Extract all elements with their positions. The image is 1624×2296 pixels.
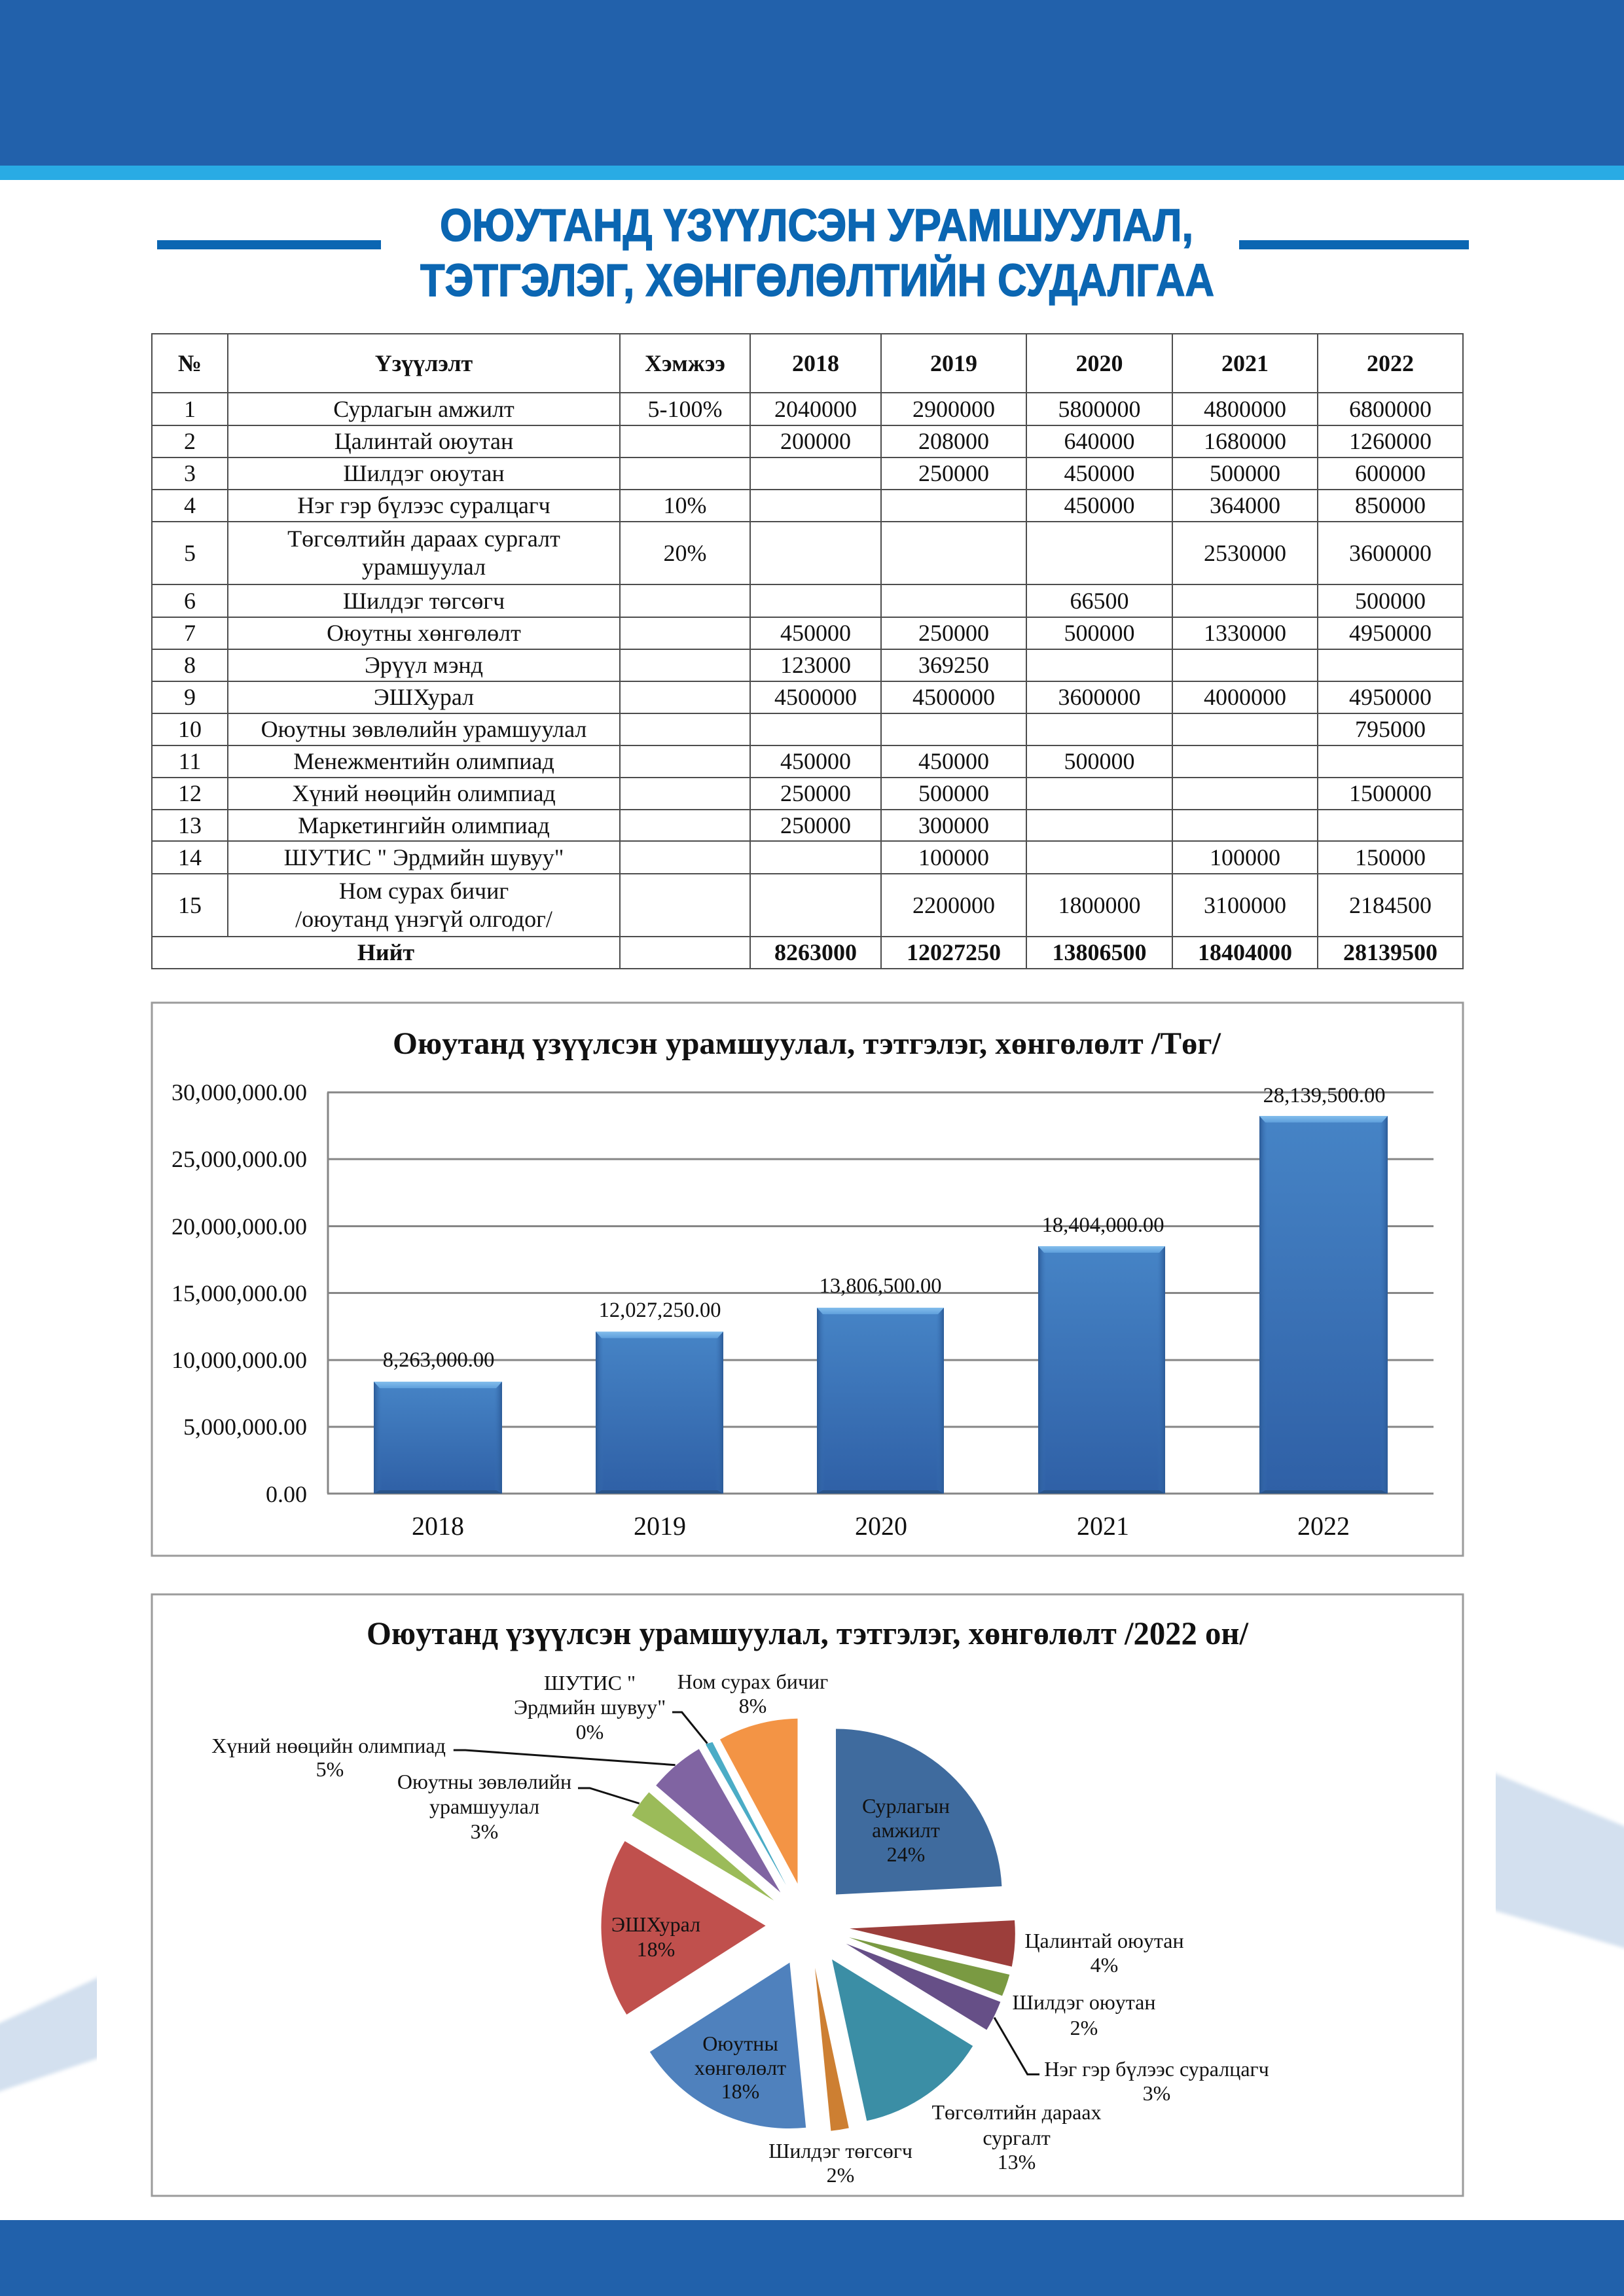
table header row: 1500000 — [1349, 780, 1432, 806]
table header row: 20% — [664, 539, 707, 565]
light blue band — [0, 166, 1624, 180]
slice: ШУТИС Эрдмийн шувуу — [706, 1742, 786, 1885]
label: Сурлагын амжилт: 24% — [887, 1842, 925, 1866]
table header row: 600000 — [1355, 460, 1426, 486]
table header row: ЭШХурал — [374, 684, 474, 710]
title line 2: ТЭТГЭЛЭГ, ХӨНГӨЛӨЛТИЙН СУДАЛГАА — [420, 254, 1214, 306]
table header row: Төгсөлтийн дараах сургалт — [287, 526, 560, 552]
table header row: Менежментийн олимпиад — [293, 748, 554, 774]
label: Төгсөлтийн дараах сургалт: сургалт — [983, 2126, 1051, 2149]
table header row: /оюутанд үнэгүй олгодог/ — [295, 906, 552, 932]
label: Сурлагын амжилт: Сурлагын — [862, 1794, 950, 1818]
table header row: 250000 — [918, 620, 989, 646]
table header row: 14 — [178, 844, 202, 870]
table header row: 11 — [179, 748, 201, 774]
table header row: 123000 — [780, 652, 851, 678]
table header row: 12 — [178, 780, 202, 806]
label: Оюутны хөнгөлөлт: 18% — [721, 2079, 759, 2103]
table header row: Хэмжээ — [645, 350, 725, 376]
table header row: Маркетингийн олимпиад — [298, 812, 550, 838]
bar 2020 — [817, 1308, 944, 1494]
table header row: 450000 — [918, 748, 989, 774]
top header band — [0, 0, 1624, 180]
bar value labels: 8,263,000.00 — [383, 1348, 494, 1372]
label: Шилдэг оюутан: Шилдэг оюутан — [1013, 1990, 1155, 2014]
slice: Нэг гэр бүлээс суралцагч — [846, 1944, 1000, 2030]
bar value labels: 12,027,250.00 — [599, 1299, 721, 1322]
bar value labels: 13,806,500.00 — [820, 1274, 941, 1298]
table header row: Сурлагын амжилт — [333, 395, 514, 422]
table header row: 7 — [184, 620, 196, 646]
slice: Шилдэг оюутан — [849, 1937, 1009, 1996]
table header row: 2022 — [1367, 350, 1414, 376]
table header row: 640000 — [1064, 428, 1135, 454]
title block — [157, 200, 1469, 306]
slice: Ном сурах бичиг — [720, 1719, 797, 1884]
y axis labels: 15,000,000.00 — [171, 1280, 307, 1306]
x axis year labels — [412, 1511, 1350, 1541]
table header row: 4800000 — [1204, 395, 1286, 422]
table header row: 450000 — [1064, 492, 1135, 518]
table header row: 3600000 — [1058, 684, 1140, 710]
label: ШУТИС: Эрдмийн шувуу" — [514, 1695, 666, 1719]
label: Сурлагын амжилт: амжилт — [872, 1818, 940, 1842]
table header row: 3600000 — [1349, 539, 1432, 565]
label: ЭШХурал: ЭШХурал — [611, 1912, 700, 1936]
label: Цалинтай оюутан: Цалинтай оюутан — [1024, 1929, 1184, 1952]
table header row: 4 — [184, 492, 196, 518]
label: ЭШХурал: 18% — [637, 1937, 675, 1961]
table header row: 15 — [178, 891, 202, 918]
table header row: Хүний нөөцийн олимпиад — [292, 780, 556, 806]
table header row: 3100000 — [1204, 891, 1286, 918]
label: Хүний нөөцийн олимпиад: 5% — [316, 1757, 344, 1781]
bar value labels — [383, 1084, 1385, 1372]
table header row: 450000 — [780, 620, 851, 646]
table header row: 500000 — [918, 780, 989, 806]
label: Оюутны зөвлөлийн урамшуулал: Оюутны зөвлөлийн — [397, 1770, 571, 1793]
table header row: 4000000 — [1204, 684, 1286, 710]
table header row: 66500 — [1070, 588, 1128, 614]
leader lines — [454, 1712, 1039, 2074]
table total row: 18404000 — [1198, 939, 1292, 965]
table header row: 6800000 — [1349, 395, 1432, 422]
table total row: 12027250 — [907, 939, 1001, 965]
bar 2019 — [596, 1331, 723, 1494]
slice: Шилдэг төгсөгч — [815, 1967, 849, 2131]
table header row: Шилдэг оюутан — [343, 460, 505, 486]
label: Хүний нөөцийн олимпиад: Хүний нөөцийн олимпиад — [211, 1734, 446, 1757]
chart title: Оюутанд үзүүлсэн урамшуулал, тэтгэлэг, хөнгөлөлт /Төг/ — [393, 1026, 1221, 1061]
label: Нэг гэр бүлээс суралцагч: Нэг гэр бүлээс суралцагч — [1044, 2057, 1269, 2081]
label: Ном сурах бичиг: 8% — [739, 1694, 767, 1717]
table header row: 500000 — [1210, 460, 1280, 486]
slice labels — [211, 1670, 1269, 2187]
table header row: 850000 — [1355, 492, 1426, 518]
y axis labels: 0.00 — [266, 1481, 307, 1507]
table header row: 3 — [184, 460, 196, 486]
table header row: 4950000 — [1349, 684, 1432, 710]
slice: Цалинтай оюутан — [850, 1920, 1015, 1967]
label: Оюутны хөнгөлөлт: Оюутны — [702, 2032, 778, 2055]
y axis labels: 10,000,000.00 — [171, 1347, 307, 1373]
label: Төгсөлтийн дараах сургалт: 13% — [998, 2150, 1036, 2174]
title line 1: ОЮУТАНД ҮЗҮҮЛСЭН УРАМШУУЛАЛ, — [440, 200, 1193, 251]
table header row: 250000 — [780, 780, 851, 806]
table header row: 364000 — [1210, 492, 1280, 518]
table header row: 795000 — [1355, 716, 1426, 742]
table header row: 100000 — [918, 844, 989, 870]
table header row: Үзүүлэлт — [375, 350, 473, 376]
table header row: 6 — [184, 588, 196, 614]
table header row: 1 — [184, 395, 196, 422]
bar value labels: 18,404,000.00 — [1042, 1213, 1164, 1237]
table header row: 2021 — [1221, 350, 1269, 376]
table header row: Шилдэг төгсөгч — [343, 588, 505, 614]
slice: Оюутны хөнгөлөлт — [650, 1963, 806, 2128]
table header row: 200000 — [780, 428, 851, 454]
table header row: 150000 — [1355, 844, 1426, 870]
x axis year labels: 2020 — [855, 1511, 907, 1541]
y axis labels: 5,000,000.00 — [183, 1414, 307, 1440]
label: Оюутны зөвлөлийн урамшуулал: 3% — [471, 1820, 498, 1843]
table header row: Нэг гэр бүлээс суралцагч — [297, 492, 550, 518]
table header row: 208000 — [918, 428, 989, 454]
y axis labels: 25,000,000.00 — [171, 1146, 307, 1172]
label: Шилдэг төгсөгч: 2% — [827, 2163, 854, 2187]
background decoration: pale wedges — [0, 1772, 1624, 2093]
table header row: 13 — [178, 812, 202, 838]
table header row: Ном сурах бичиг — [339, 878, 509, 904]
label: Оюутны хөнгөлөлт: хөнгөлөлт — [695, 2056, 786, 2079]
table header row: 450000 — [780, 748, 851, 774]
x axis year labels: 2022 — [1297, 1511, 1350, 1541]
label: Нэг гэр бүлээс суралцагч: 3% — [1143, 2081, 1170, 2105]
label: Шилдэг төгсөгч: Шилдэг төгсөгч — [768, 2139, 912, 2162]
table header row: 1260000 — [1349, 428, 1432, 454]
table header row: Оюутны зөвлөлийн урамшуулал — [261, 716, 586, 742]
table header row: 2020 — [1076, 350, 1123, 376]
x axis year labels: 2021 — [1077, 1511, 1129, 1541]
table header row: 100000 — [1210, 844, 1280, 870]
slice: ЭШХурал — [601, 1841, 766, 2015]
panel: bar chart of awards by year — [151, 1001, 1464, 1556]
table header row: 5 — [184, 539, 196, 565]
y axis labels: 30,000,000.00 — [171, 1079, 307, 1105]
bar 2022 — [1259, 1116, 1388, 1494]
table header row: Цалинтай оюутан — [334, 428, 513, 454]
slice: Хүний нөөцийн олимпиад — [656, 1749, 780, 1892]
table header row: 369250 — [918, 652, 989, 678]
table header row: 450000 — [1064, 460, 1135, 486]
label: ШУТИС: 0% — [576, 1720, 604, 1744]
table header row: № — [178, 350, 202, 376]
table header row: урамшуулал — [362, 554, 486, 580]
table header row: 250000 — [780, 812, 851, 838]
table header row: Оюутны хөнгөлөлт — [327, 620, 521, 646]
table header row — [178, 350, 1437, 965]
table header row: 500000 — [1064, 620, 1135, 646]
table header row: 2184500 — [1349, 891, 1432, 918]
bar 2021 — [1038, 1246, 1165, 1494]
footer band — [0, 2220, 1624, 2296]
table header row: 8 — [184, 652, 196, 678]
table total row — [357, 939, 1437, 965]
table header row: 250000 — [918, 460, 989, 486]
table header row: 2040000 — [774, 395, 857, 422]
table header row: 2018 — [792, 350, 839, 376]
table total row: 8263000 — [774, 939, 857, 965]
label: Цалинтай оюутан: 4% — [1091, 1953, 1118, 1977]
table header row: 10 — [178, 716, 202, 742]
table header row: 9 — [184, 684, 196, 710]
table header row: ШУТИС " Эрдмийн шувуу" — [284, 844, 564, 870]
y axis labels: 20,000,000.00 — [171, 1213, 307, 1240]
table header row: 1800000 — [1058, 891, 1140, 918]
panel: pie chart 2022 — [151, 1593, 1464, 2197]
table total row: Нийт — [357, 939, 414, 965]
table header row: 5800000 — [1058, 395, 1140, 422]
label: Ном сурах бичиг: Ном сурах бичиг — [677, 1670, 828, 1693]
y axis labels — [171, 1079, 307, 1507]
table header row: Эрүүл мэнд — [365, 652, 483, 678]
slice: Оюутны зөвлөлийн урамшуулал — [632, 1792, 774, 1901]
table header row: 4950000 — [1349, 620, 1432, 646]
slice: Сурлагын амжилт — [836, 1729, 1001, 1894]
label: ШУТИС: ШУТИС " — [544, 1671, 636, 1695]
table header row: 4500000 — [912, 684, 995, 710]
data table — [151, 333, 1464, 969]
pie chart title: Оюутанд үзүүлсэн урамшуулал, тэтгэлэг, хөнгөлөлт /2022 он/ — [367, 1615, 1249, 1651]
table header row: 2530000 — [1204, 539, 1286, 565]
table header row: 4500000 — [774, 684, 857, 710]
table header row: 2200000 — [912, 891, 995, 918]
pie slices — [601, 1719, 1015, 2131]
table header row: 500000 — [1064, 748, 1135, 774]
table header row: 2900000 — [912, 395, 995, 422]
table total row: 13806500 — [1053, 939, 1147, 965]
label: Оюутны зөвлөлийн урамшуулал: урамшуулал — [429, 1795, 539, 1818]
x axis year labels: 2018 — [412, 1511, 464, 1541]
table header row: 2019 — [930, 350, 977, 376]
bar 2018 — [374, 1382, 502, 1494]
table header row: 1330000 — [1204, 620, 1286, 646]
table header row: 500000 — [1355, 588, 1426, 614]
table header row: 5-100% — [648, 395, 722, 422]
bar value labels: 28,139,500.00 — [1263, 1084, 1385, 1107]
table total row: 28139500 — [1343, 939, 1437, 965]
left title rule — [157, 240, 381, 249]
table header row: 1680000 — [1204, 428, 1286, 454]
dark blue band — [0, 0, 1624, 166]
table header row: 300000 — [918, 812, 989, 838]
table header row: 10% — [664, 492, 707, 518]
label: Шилдэг оюутан: 2% — [1070, 2016, 1098, 2039]
table header row: 2 — [184, 428, 196, 454]
slice: Төгсөлтийн дараах сургалт — [832, 1960, 973, 2121]
right title rule — [1239, 240, 1469, 249]
label: Төгсөлтийн дараах сургалт: Төгсөлтийн дараах — [931, 2100, 1102, 2124]
x axis year labels: 2019 — [634, 1511, 686, 1541]
